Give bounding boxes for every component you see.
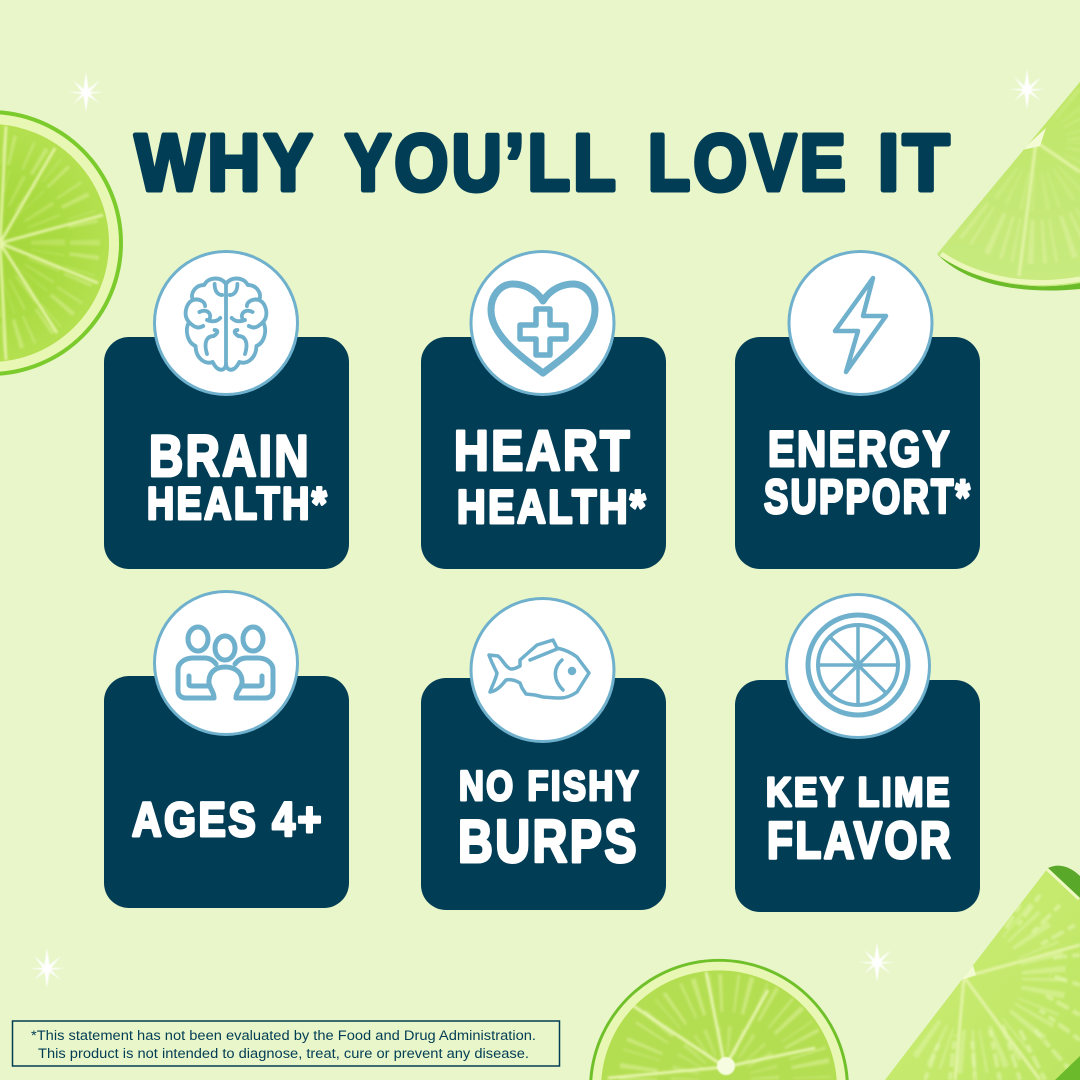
sublabel: SUPPORT* [764, 471, 972, 524]
icon: heart with cross [491, 284, 595, 373]
lime wedge: bottom right [885, 866, 1080, 1080]
card background [421, 678, 666, 910]
icon: lime wheel [808, 615, 908, 715]
icon: lightning bolt [835, 278, 886, 372]
label: BRAIN [149, 424, 311, 489]
lime wedge: top right [937, 82, 1080, 290]
icon badge [786, 594, 930, 738]
icon badge [471, 252, 614, 394]
icon badge [471, 598, 614, 742]
card background [735, 680, 980, 912]
title [135, 118, 953, 207]
sublabel: HEALTH* [147, 478, 329, 529]
label: KEY LIME [766, 769, 952, 815]
icon: brain [186, 278, 266, 370]
card background [104, 676, 349, 908]
sparkle: bottom left [29, 948, 65, 988]
sparkle: top left [68, 72, 104, 112]
label: HEART [454, 419, 632, 483]
card background [104, 337, 349, 569]
card background [421, 337, 666, 569]
panel: energy support [735, 252, 980, 569]
lime slice: bottom center [589, 959, 849, 1080]
sublabel: BURPS [458, 808, 639, 875]
panel: ages 4+ [104, 592, 349, 908]
panel: key lime flavor [735, 594, 980, 912]
disclaimer box [12, 1021, 560, 1066]
icon: fish [489, 640, 589, 698]
card background [735, 337, 980, 569]
panel: no fishy burps [421, 598, 666, 910]
label: NO FISHY [459, 762, 641, 809]
panel: heart health [421, 252, 666, 569]
sparkle: top right [1009, 69, 1045, 109]
sparkle: bottom right [859, 942, 895, 982]
title: WHY [135, 118, 316, 207]
sublabel: HEALTH* [457, 480, 648, 533]
title: LOVE [648, 118, 849, 207]
icon badge [789, 252, 932, 394]
label: ENERGY [768, 421, 952, 477]
disclaimer line 1: *This statement has not been evaluated by the Food and Drug Administration. [31, 1028, 536, 1043]
icon: family [178, 627, 273, 698]
label: AGES 4+ [132, 794, 324, 847]
title: IT [878, 118, 953, 207]
icon badge [154, 592, 298, 734]
lime slice: top left [0, 110, 123, 376]
sublabel: FLAVOR [767, 812, 953, 870]
title: YOU’LL [345, 118, 619, 207]
panel: brain health [104, 252, 349, 569]
disclaimer line 2: This product is not intended to diagnose, treat, cure or prevent any disease. [38, 1046, 529, 1061]
icon badge [154, 252, 298, 394]
